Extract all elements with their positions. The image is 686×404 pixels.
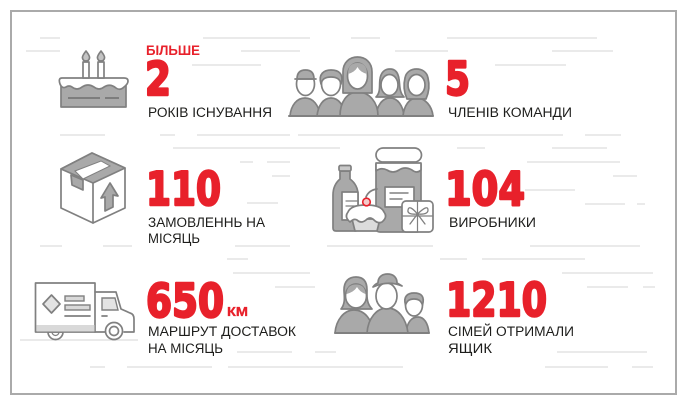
- stat: 650 km delivery route: КМ: [227, 304, 248, 319]
- stat: more than 2 years: РОКІВ ІСНУВАННЯ: [148, 105, 272, 120]
- stat: 1210 families received a box: 1210: [446, 273, 547, 327]
- stat: 1210 families received a box: ЯЩИК: [448, 341, 492, 356]
- stat: 5 team members: ЧЛЕНІВ КОМАНДИ: [448, 105, 572, 120]
- stat: 110 orders per month: ЗАМОВЛЕННЬ НА: [148, 215, 265, 230]
- stat: 5 team members: [445, 52, 572, 120]
- stat: 650 km delivery route: МАРШРУТ ДОСТАВОК: [148, 324, 296, 339]
- stat: 650 km delivery route: 650: [146, 274, 224, 328]
- stat: 104 producers: 104: [445, 162, 525, 216]
- stat: 110 orders per month: 110: [146, 162, 221, 216]
- icon: family: [335, 274, 429, 333]
- icon: team of five people: [289, 57, 433, 116]
- stat: 1210 families received a box: [446, 273, 574, 356]
- stat: 1210 families received a box: СІМЕЙ ОТРИМАЛИ: [448, 324, 574, 339]
- stat: more than 2 years: [145, 42, 272, 120]
- stat: more than 2 years: БІЛЬШЕ: [146, 42, 200, 58]
- stat: 650 km delivery route: [146, 274, 296, 356]
- stat: 650 km delivery route: НА МІСЯЦЬ: [148, 341, 223, 356]
- stat: more than 2 years: 2: [145, 52, 171, 106]
- icon: parcel box: [61, 153, 125, 223]
- stat: 5 team members: 5: [445, 52, 470, 106]
- icon: delivery truck: [36, 283, 134, 340]
- stat: 110 orders per month: [146, 162, 265, 246]
- stat: 104 producers: ВИРОБНИКИ: [449, 215, 536, 230]
- icon: producer goods: [333, 148, 433, 232]
- stat: 110 orders per month: МІСЯЦЬ: [148, 231, 200, 246]
- icon: birthday cake: [59, 51, 128, 107]
